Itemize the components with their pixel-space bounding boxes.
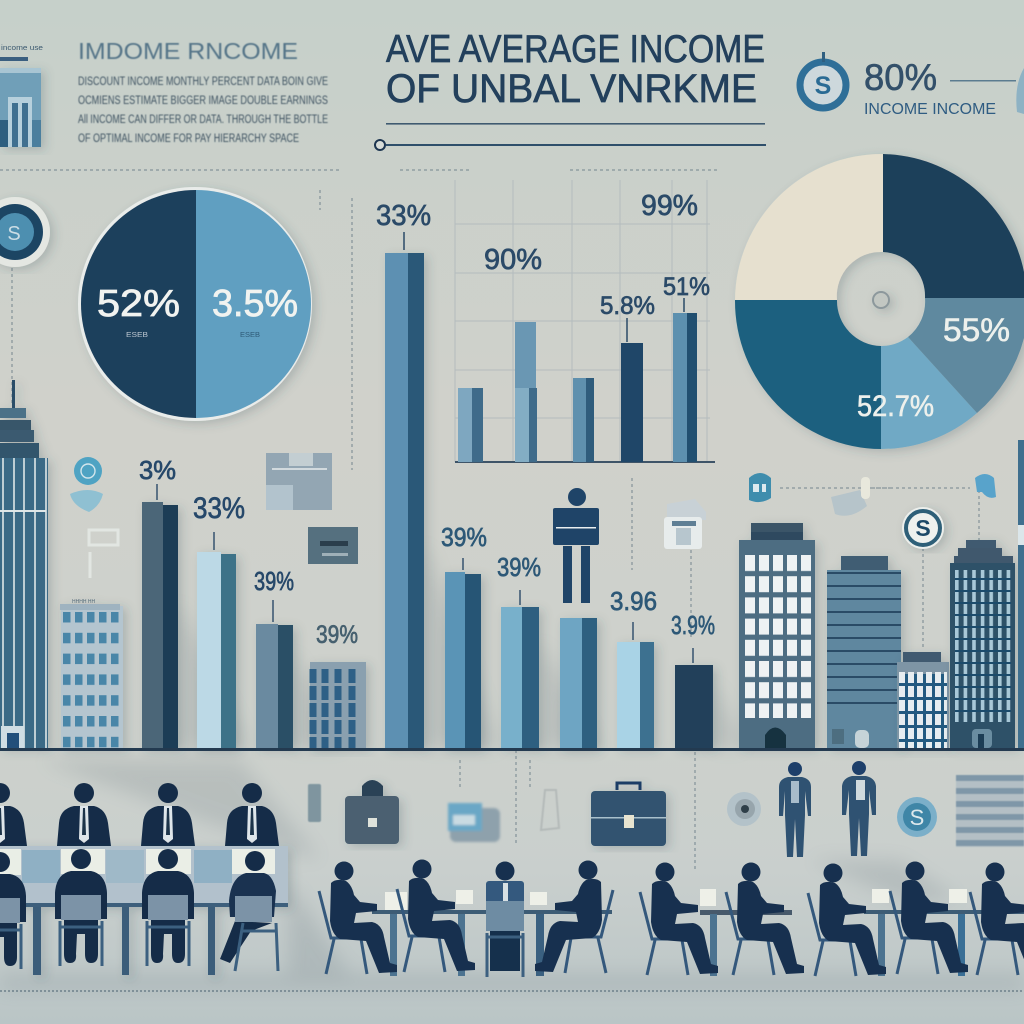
top row person — [141, 783, 195, 846]
building: striped tower — [827, 556, 901, 748]
upper chart labels: 90% — [484, 244, 542, 276]
upper bar chart — [455, 180, 715, 463]
seated figures and tables — [319, 860, 1024, 977]
front person with side-turned chair — [220, 851, 278, 971]
icon: blue tag — [749, 473, 771, 502]
seated person — [808, 864, 886, 976]
icon: small tag — [308, 784, 321, 822]
icon: faint tag — [89, 530, 118, 578]
upper chart labels: 51% — [663, 273, 710, 301]
seated person facing left — [535, 860, 613, 973]
left mid building — [60, 599, 123, 748]
donut label: 52%: 52.7% — [857, 390, 934, 423]
building: windows tower — [739, 523, 815, 748]
chart doc icons — [70, 453, 358, 578]
bar: mid 5 — [675, 665, 713, 748]
icon: grey briefcase — [345, 780, 399, 844]
pie label: right value: ESEB — [240, 332, 260, 339]
stat: income percent: 80% — [864, 57, 937, 98]
bar: mid 1 — [445, 572, 481, 748]
bar — [673, 313, 697, 462]
title: OF UNBAL VNRKME — [386, 67, 757, 111]
seated person — [890, 862, 968, 974]
mid bar labels: 39% — [497, 552, 541, 582]
icon: coin s: S — [910, 805, 924, 830]
conference table — [0, 783, 288, 975]
icon: s badge — [902, 507, 944, 549]
seated person — [970, 862, 1024, 975]
icon: left badge — [0, 197, 50, 267]
icon: blue coin — [70, 457, 103, 512]
tall bar — [385, 253, 424, 748]
baseline — [0, 748, 1024, 751]
pie label: right value: 3.5% — [212, 283, 298, 325]
icon: document — [266, 453, 332, 510]
title — [386, 28, 765, 111]
icon: faint cup — [831, 477, 870, 516]
bar: mid 2 — [501, 607, 539, 748]
upper chart labels: 5.8% — [600, 292, 655, 320]
bar: mid 4 — [617, 642, 654, 748]
text block: description: OCMIENS ESTIMATE BIGGER IMAGE DOUBLE EARNINGS — [78, 95, 328, 107]
title rule lines — [375, 123, 766, 150]
right skyline icons — [749, 473, 996, 549]
left bar labels: 39% — [254, 566, 294, 596]
text block: description: OF OPTIMAL INCOME FOR PAY HIERARCHY SPACE — [78, 133, 299, 145]
top row person — [57, 783, 111, 846]
bar: left 2 — [197, 552, 236, 748]
icon: blurred building tile — [448, 803, 500, 842]
left bar labels: 39% — [316, 621, 358, 649]
mid bar labels — [441, 522, 715, 663]
center person from behind — [486, 862, 524, 977]
bar — [573, 378, 594, 462]
heading: income: IMDOME RNCOME — [78, 38, 298, 64]
front person — [0, 852, 26, 969]
donut chart: right — [735, 154, 1024, 449]
icon: coin s — [897, 797, 937, 837]
building: right edge sliver — [1018, 440, 1024, 748]
text block: description: All INCOME CAN DIFFER OR DATA. THROUGH THE BOTTLE — [78, 114, 328, 126]
mid bars — [445, 572, 713, 748]
header small label — [0, 45, 43, 61]
upper chart labels — [376, 190, 710, 342]
text block: description — [78, 76, 328, 145]
mid bar labels: 3.9% — [671, 610, 715, 640]
stat icon: dollar: S — [815, 72, 831, 100]
upper chart labels: 33% — [376, 200, 431, 232]
header small label: income use — [1, 45, 43, 52]
bar — [621, 343, 643, 462]
header image: building — [0, 68, 41, 147]
front person — [142, 849, 194, 966]
stat: income percent: INCOME INCOME — [864, 101, 996, 118]
laptop screen — [232, 849, 275, 874]
table top — [0, 846, 288, 975]
left bar labels: 33% — [193, 492, 245, 525]
pie label: left value — [97, 283, 180, 339]
seated person — [319, 862, 397, 974]
title: AVE AVERAGE INCOME — [386, 28, 765, 71]
icon: main briefcase — [591, 783, 666, 846]
table 1 — [372, 890, 612, 976]
icon: machine — [664, 499, 706, 549]
building: glass tower — [950, 540, 1015, 748]
standing figure: suit left — [779, 762, 811, 857]
upper chart labels: 99% — [641, 190, 698, 222]
striped panel — [956, 775, 1024, 847]
bar — [515, 322, 537, 462]
left skyscraper — [0, 380, 48, 748]
laptop screen — [146, 849, 191, 874]
mid bar labels: 39% — [441, 522, 487, 552]
icon: s badge: S — [915, 515, 931, 541]
stat icon: dollar — [800, 52, 846, 108]
pie label: left value: ESEB — [126, 332, 148, 339]
front person — [55, 849, 107, 966]
left bar labels — [139, 455, 358, 649]
seated person — [726, 862, 804, 975]
mid bar labels: 3.96 — [610, 586, 657, 616]
low building — [310, 662, 366, 748]
icon: faint tag — [541, 790, 559, 830]
standing figure: suit right — [842, 761, 876, 856]
icon: left badge: S — [7, 223, 21, 245]
laptop screen — [61, 849, 105, 874]
bar: mid 3 — [560, 618, 597, 748]
stat: income percent — [864, 57, 996, 118]
bar: left 3 — [256, 624, 293, 748]
pie label: left value: 52% — [97, 283, 180, 325]
table 2 — [700, 889, 792, 976]
pie chart: left — [78, 187, 312, 421]
seated person — [397, 860, 475, 972]
icon: device — [308, 527, 358, 564]
donut label: 55%: 55% — [943, 312, 1010, 348]
standing figure — [553, 488, 599, 603]
bar: left 1 — [142, 502, 178, 748]
top row person — [0, 783, 27, 846]
building: small block — [897, 652, 949, 748]
stat edge icon — [950, 68, 1024, 114]
icon: blue pin — [975, 474, 996, 498]
laptop screen — [0, 849, 21, 875]
icon: swirl disc — [727, 792, 761, 826]
table 3 — [864, 889, 1024, 976]
top row person — [225, 783, 279, 846]
text block: description: DISCOUNT INCOME MONTHLY PERCENT DATA BOIN GIVE — [78, 76, 328, 88]
bar — [458, 388, 483, 462]
seated person — [640, 862, 718, 975]
left bar labels: 3% — [139, 455, 176, 485]
left mid building: HHHH HH — [72, 599, 95, 605]
